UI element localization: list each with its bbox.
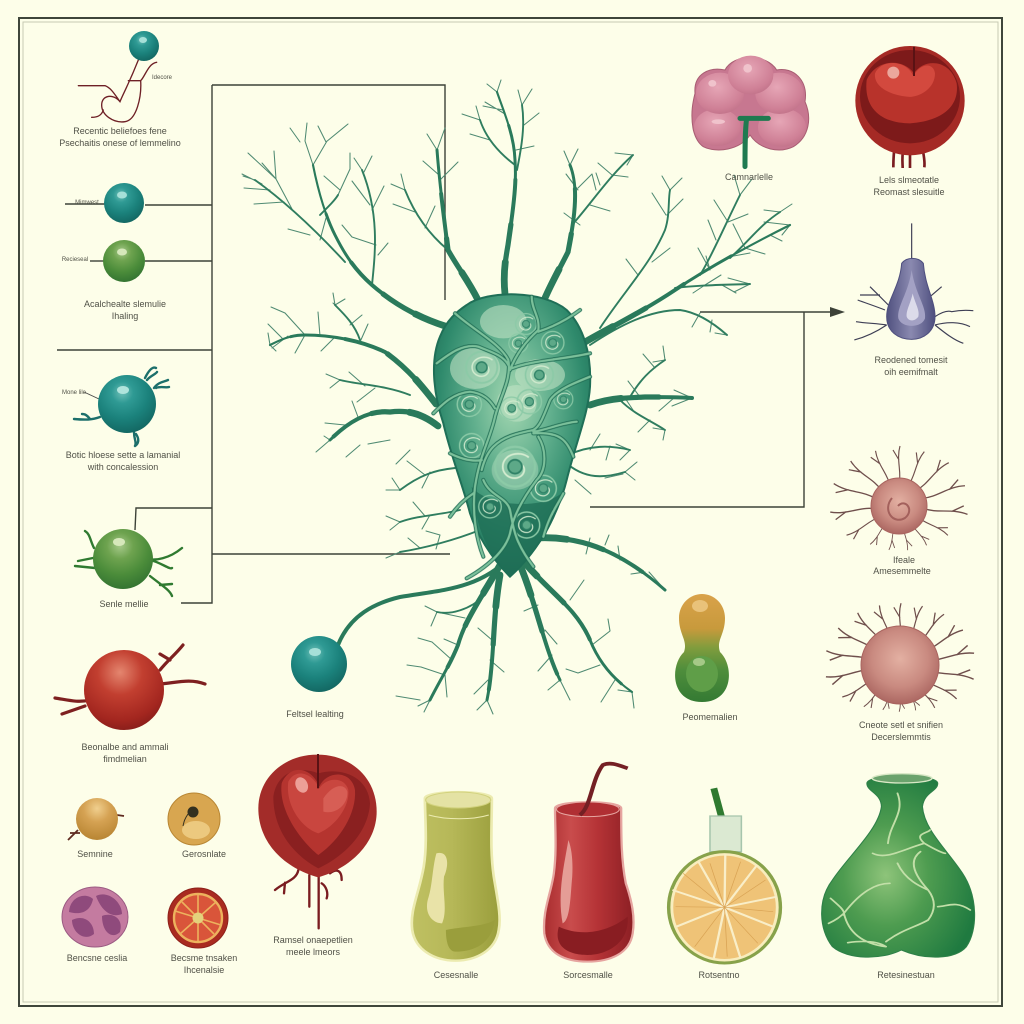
apple body — [258, 755, 377, 877]
lobes — [692, 57, 809, 150]
flask neck — [710, 816, 741, 852]
caption purple bulb: Reodened tomesit — [874, 355, 948, 365]
central tree cell — [242, 80, 792, 714]
red vessel — [544, 764, 634, 962]
tree main branches tapered — [270, 92, 790, 700]
small gold cell — [68, 798, 124, 840]
pink section disc — [62, 887, 128, 947]
bulb hairs — [854, 223, 973, 343]
spikes — [825, 603, 975, 712]
caption red orange disc: Ihcenalsie — [184, 965, 224, 975]
spiky pink cell small — [830, 446, 968, 551]
caption top left: Psechaitis onese of lemmelino — [59, 138, 181, 148]
peanut gold green — [675, 594, 729, 702]
teal ball 2: Mimwest — [75, 200, 99, 206]
caption gold cell: Semnine — [77, 849, 113, 859]
caption pink organ: Camnarlelle — [725, 172, 773, 182]
caption spiky large: Decerslemmtis — [871, 732, 931, 742]
top teal ball with curve — [78, 31, 173, 122]
tree twigs — [242, 80, 792, 714]
apple roots — [275, 870, 342, 928]
caption yellow vessel: Cesesnalle — [434, 970, 478, 980]
tree secondary branches — [255, 105, 780, 613]
green flask — [822, 774, 975, 957]
teal large cell: Mone lile — [62, 390, 87, 396]
dark lower body — [472, 487, 562, 577]
yellow vessel — [412, 792, 500, 961]
spiky pink cell large — [825, 603, 975, 712]
body silhouette — [434, 294, 590, 577]
caption red organ: Lels slmeotatle — [879, 175, 939, 185]
caption teal large: Botic hloese sette a lamanial — [66, 450, 180, 460]
caption spiky small: Amesemmelte — [873, 566, 931, 576]
pink lobed organ — [692, 56, 809, 167]
teal ball — [129, 31, 159, 61]
caption teal ball: Feltsel lealting — [286, 709, 344, 719]
fruit rind — [669, 852, 780, 963]
green ball 2: Recieseal — [62, 257, 88, 263]
caption red vessel: Sorcesmalle — [563, 970, 613, 980]
small label: Idecore — [152, 75, 173, 81]
green stem — [740, 118, 768, 167]
flask veins — [829, 793, 970, 947]
segment dividers — [672, 854, 777, 958]
red squiggle — [78, 60, 157, 122]
caption teal large: with concalession — [87, 462, 158, 472]
caption green flask: Retesinestuan — [877, 970, 935, 980]
gold disc — [168, 793, 220, 845]
caption green ball: Ihaling — [112, 311, 138, 321]
arrow head — [830, 307, 845, 317]
red cell left — [55, 645, 205, 730]
caption red cell: fimdmelian — [103, 754, 147, 764]
caption peanut: Peomemalien — [682, 712, 738, 722]
petal highlights — [708, 64, 752, 124]
green ball 2 — [62, 240, 145, 282]
caption red cell: Beonalbe and ammali — [81, 742, 169, 752]
red organ top right — [855, 46, 965, 168]
caption top left: Recentic beliefoes fene — [73, 126, 167, 136]
caption spiky large: Cneote setl et snifien — [859, 720, 943, 730]
connector lines — [57, 85, 832, 603]
spirals — [457, 314, 573, 538]
caption citrus: Rotsentno — [698, 970, 740, 980]
caption spiky small: Ifeale — [893, 555, 915, 565]
caption red organ: Reomast slesuitle — [873, 187, 945, 197]
large red apple — [258, 754, 377, 928]
teal ball bottom of tree — [291, 636, 347, 692]
caption purple bulb: oih eemifmalt — [884, 367, 938, 377]
vine outlines — [433, 297, 590, 578]
caption green ball: Acalchealte slemulie — [84, 299, 166, 309]
stem to teal ball — [338, 555, 512, 645]
citrus flask — [669, 788, 780, 963]
red orange disc — [168, 888, 228, 948]
teal large cell — [62, 368, 169, 446]
cell body — [433, 294, 590, 578]
green large cell — [75, 529, 182, 596]
flask stem — [714, 788, 721, 817]
purple bulb — [854, 223, 973, 343]
caption gold disc: Gerosnlate — [182, 849, 226, 859]
teal ball 2 — [65, 183, 144, 223]
vine highlights — [433, 297, 590, 578]
spikes — [830, 446, 968, 551]
caption pink disc: Bencsne ceslia — [67, 953, 127, 963]
caption red orange disc: Becsme tnsaken — [171, 953, 237, 963]
caption large apple: Ramsel onaepetlien — [273, 935, 353, 945]
caption large apple: meele lmeors — [286, 947, 341, 957]
caption green large: Senle mellie — [99, 599, 149, 609]
pale inner blobs — [450, 305, 565, 490]
segment fibres — [676, 862, 773, 957]
